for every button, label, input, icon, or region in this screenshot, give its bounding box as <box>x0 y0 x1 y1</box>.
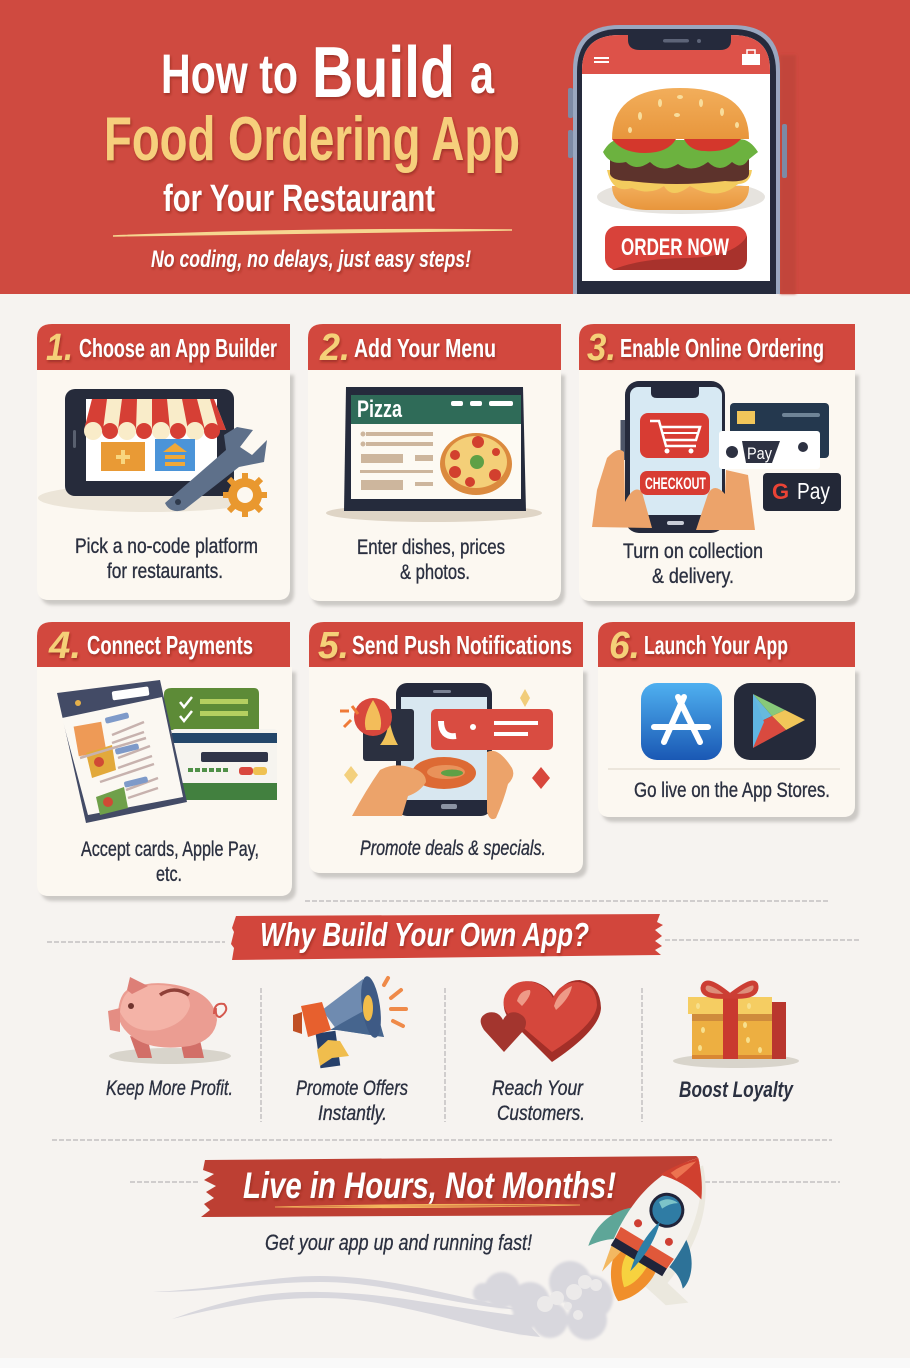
text: reach your customers: Reach Your <box>492 1077 584 1100</box>
icon: push notification phone <box>340 683 553 819</box>
icon: app store <box>641 683 722 760</box>
text: reach your customers <box>492 1077 585 1125</box>
text: step 3 description: Turn on collection <box>623 540 763 563</box>
heading: step 6 <box>609 625 788 667</box>
icon: play store <box>734 683 816 760</box>
heading: step 6: Launch Your App <box>644 630 788 660</box>
heading: step 6: 6. <box>609 625 640 667</box>
title: for Your Restaurant <box>163 178 435 220</box>
heading: step 3: 3. <box>587 327 616 369</box>
heading: step 1: Choose an App Builder <box>79 333 277 363</box>
benefit: keep more profit <box>106 977 233 1100</box>
heading: step 2 <box>319 327 496 369</box>
heading: step 5 <box>318 625 572 667</box>
icon: pizza <box>440 433 512 495</box>
text: get your app up: Get your app up and running fast! <box>265 1230 532 1255</box>
icon: burger <box>597 88 765 214</box>
heading: why build your own app: Why Build Your Own App? <box>260 916 589 953</box>
banner: live in hours <box>201 1156 700 1217</box>
button: order now <box>605 226 747 270</box>
text: step 3 description: & delivery. <box>652 565 734 588</box>
icon: checkout phone: Pay <box>747 444 772 463</box>
panel: step 5 <box>309 622 583 873</box>
title: a <box>470 42 495 105</box>
icon: rocket <box>571 1132 755 1333</box>
icon: menu on tablet <box>326 387 542 522</box>
icon: apple pay card <box>719 431 820 469</box>
icon: hearts <box>481 980 601 1062</box>
heading: step 2: Add Your Menu <box>354 333 496 363</box>
heading: step 2: 2. <box>319 327 350 369</box>
panel: step 4 <box>37 622 292 896</box>
benefit: promote offers <box>293 975 408 1125</box>
icon: storefront tablet with wrench <box>38 389 267 517</box>
heading: step 3 <box>587 327 824 369</box>
title underline <box>113 230 512 236</box>
title: How to <box>161 42 298 105</box>
icon: piggy bank <box>108 977 231 1064</box>
panel: step 1 <box>37 324 290 600</box>
text: step 4 description <box>81 838 259 886</box>
icon: megaphone <box>293 975 406 1068</box>
icon: checkout phone <box>592 381 841 533</box>
heading: step 4: 4. <box>48 625 81 667</box>
text: step 2 description <box>357 536 505 584</box>
heading: step 5: Send Push Notifications <box>352 630 572 660</box>
text: step 2 description: Enter dishes, prices <box>357 536 505 559</box>
text: keep more profit: Keep More Profit. <box>106 1077 233 1100</box>
benefit: boost loyalty <box>673 983 799 1102</box>
text: step 2 description: & photos. <box>400 561 470 584</box>
icon: hands <box>592 450 755 530</box>
heading: step 1 <box>46 327 277 369</box>
heading: step 5: 5. <box>318 625 349 667</box>
header banner <box>0 0 910 294</box>
text: step 1 description: Pick a no-code platform <box>75 535 258 558</box>
heading: step 1: 1. <box>46 327 73 369</box>
text: promote offers: Promote Offers <box>296 1077 408 1100</box>
panel: step 6 <box>598 622 855 817</box>
heading: step 4: Connect Payments <box>87 630 253 660</box>
text: step 1 description <box>75 535 258 583</box>
text: reach your customers: Customers. <box>497 1102 585 1125</box>
text: step 5 description: Promote deals & specials. <box>360 837 546 860</box>
banner: live in hours: Live in Hours, Not Months! <box>243 1165 616 1206</box>
smoke trail <box>153 1261 613 1340</box>
text: step 3 description <box>623 540 763 588</box>
title <box>104 33 520 220</box>
benefit: reach your customers <box>481 980 601 1125</box>
heading: step 3: Enable Online Ordering <box>620 333 824 363</box>
icon: google pay card <box>763 473 841 511</box>
heading: step 4 <box>48 625 253 667</box>
icon: gift box <box>673 983 799 1068</box>
text: promote offers: Instantly. <box>318 1102 387 1125</box>
text: step 1 description: for restaurants. <box>107 560 223 583</box>
panel: step 2 <box>308 324 561 601</box>
text: step 6 description: Go live on the App Stores. <box>634 779 830 802</box>
subtitle: No coding, no delays, just easy steps! <box>151 246 471 273</box>
icon: checkout phone: CHECKOUT <box>645 474 706 493</box>
title: Food Ordering App <box>104 105 520 174</box>
icon: checkout phone: G <box>772 479 789 504</box>
panel: step 3 <box>579 324 855 601</box>
text: promote offers <box>296 1077 408 1125</box>
icon: payment cards and menu <box>57 680 277 823</box>
icon: checkout phone: Pay <box>797 478 830 504</box>
footer strip <box>0 1358 910 1368</box>
text: step 4 description: etc. <box>156 863 182 886</box>
title: Build <box>312 33 455 113</box>
icon: menu on tablet: Pizza <box>357 396 402 423</box>
button: order now: ORDER NOW <box>621 234 729 261</box>
icon: phone with burger <box>568 25 787 294</box>
text: boost loyalty: Boost Loyalty <box>679 1077 794 1102</box>
text: step 4 description: Accept cards, Apple Pay, <box>81 838 259 861</box>
